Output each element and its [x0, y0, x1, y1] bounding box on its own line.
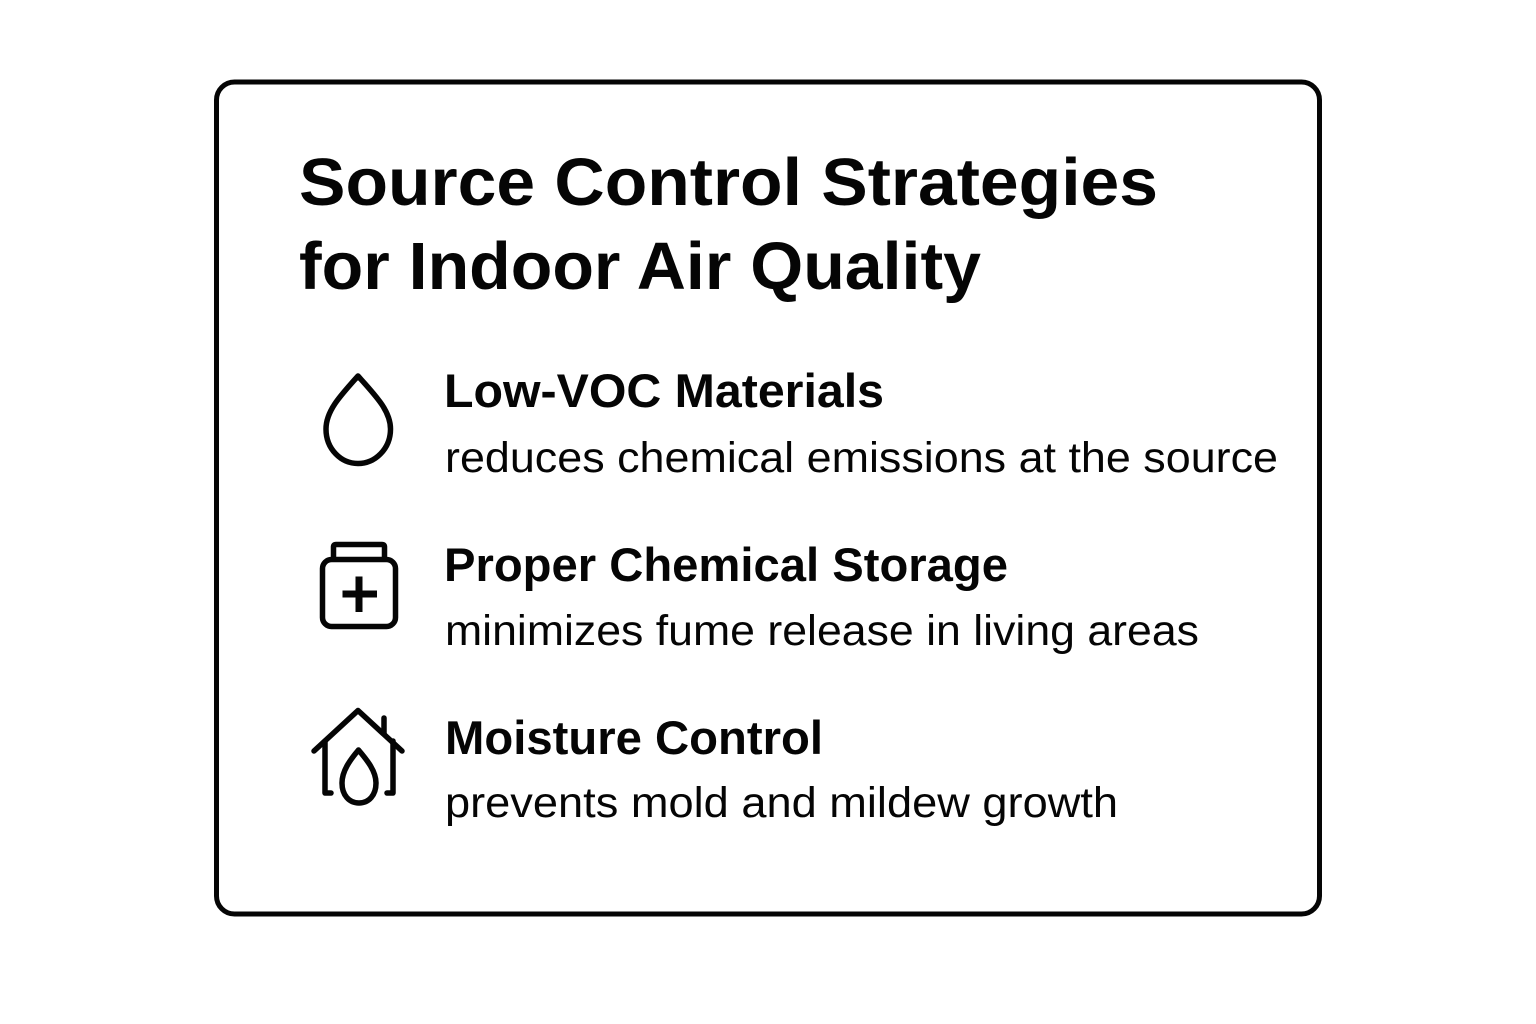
icon: water drop: [326, 376, 390, 464]
text: proper chemical storage: Proper Chemical Storage: [444, 538, 1008, 591]
panel: source control card: [216, 82, 1320, 914]
text: moisture control: prevents mold and mildew growth: [445, 779, 1118, 827]
text: moisture control: [445, 711, 1118, 827]
text: low-VOC materials: Low-VOC Materials: [444, 364, 884, 417]
text: proper chemical storage: [444, 538, 1199, 655]
icon: house with moisture drop: [314, 710, 402, 803]
icon: chemical container: [322, 544, 396, 626]
text: moisture control: Moisture Control: [445, 711, 823, 764]
text: low-VOC materials: [444, 364, 1278, 482]
title: [299, 145, 1158, 304]
text: proper chemical storage: minimizes fume release in living areas: [445, 607, 1199, 655]
text: low-VOC materials: reduces chemical emissions at the source: [445, 434, 1278, 482]
title: Source Control Strategies: [299, 145, 1158, 220]
title: for Indoor Air Quality: [299, 229, 981, 304]
